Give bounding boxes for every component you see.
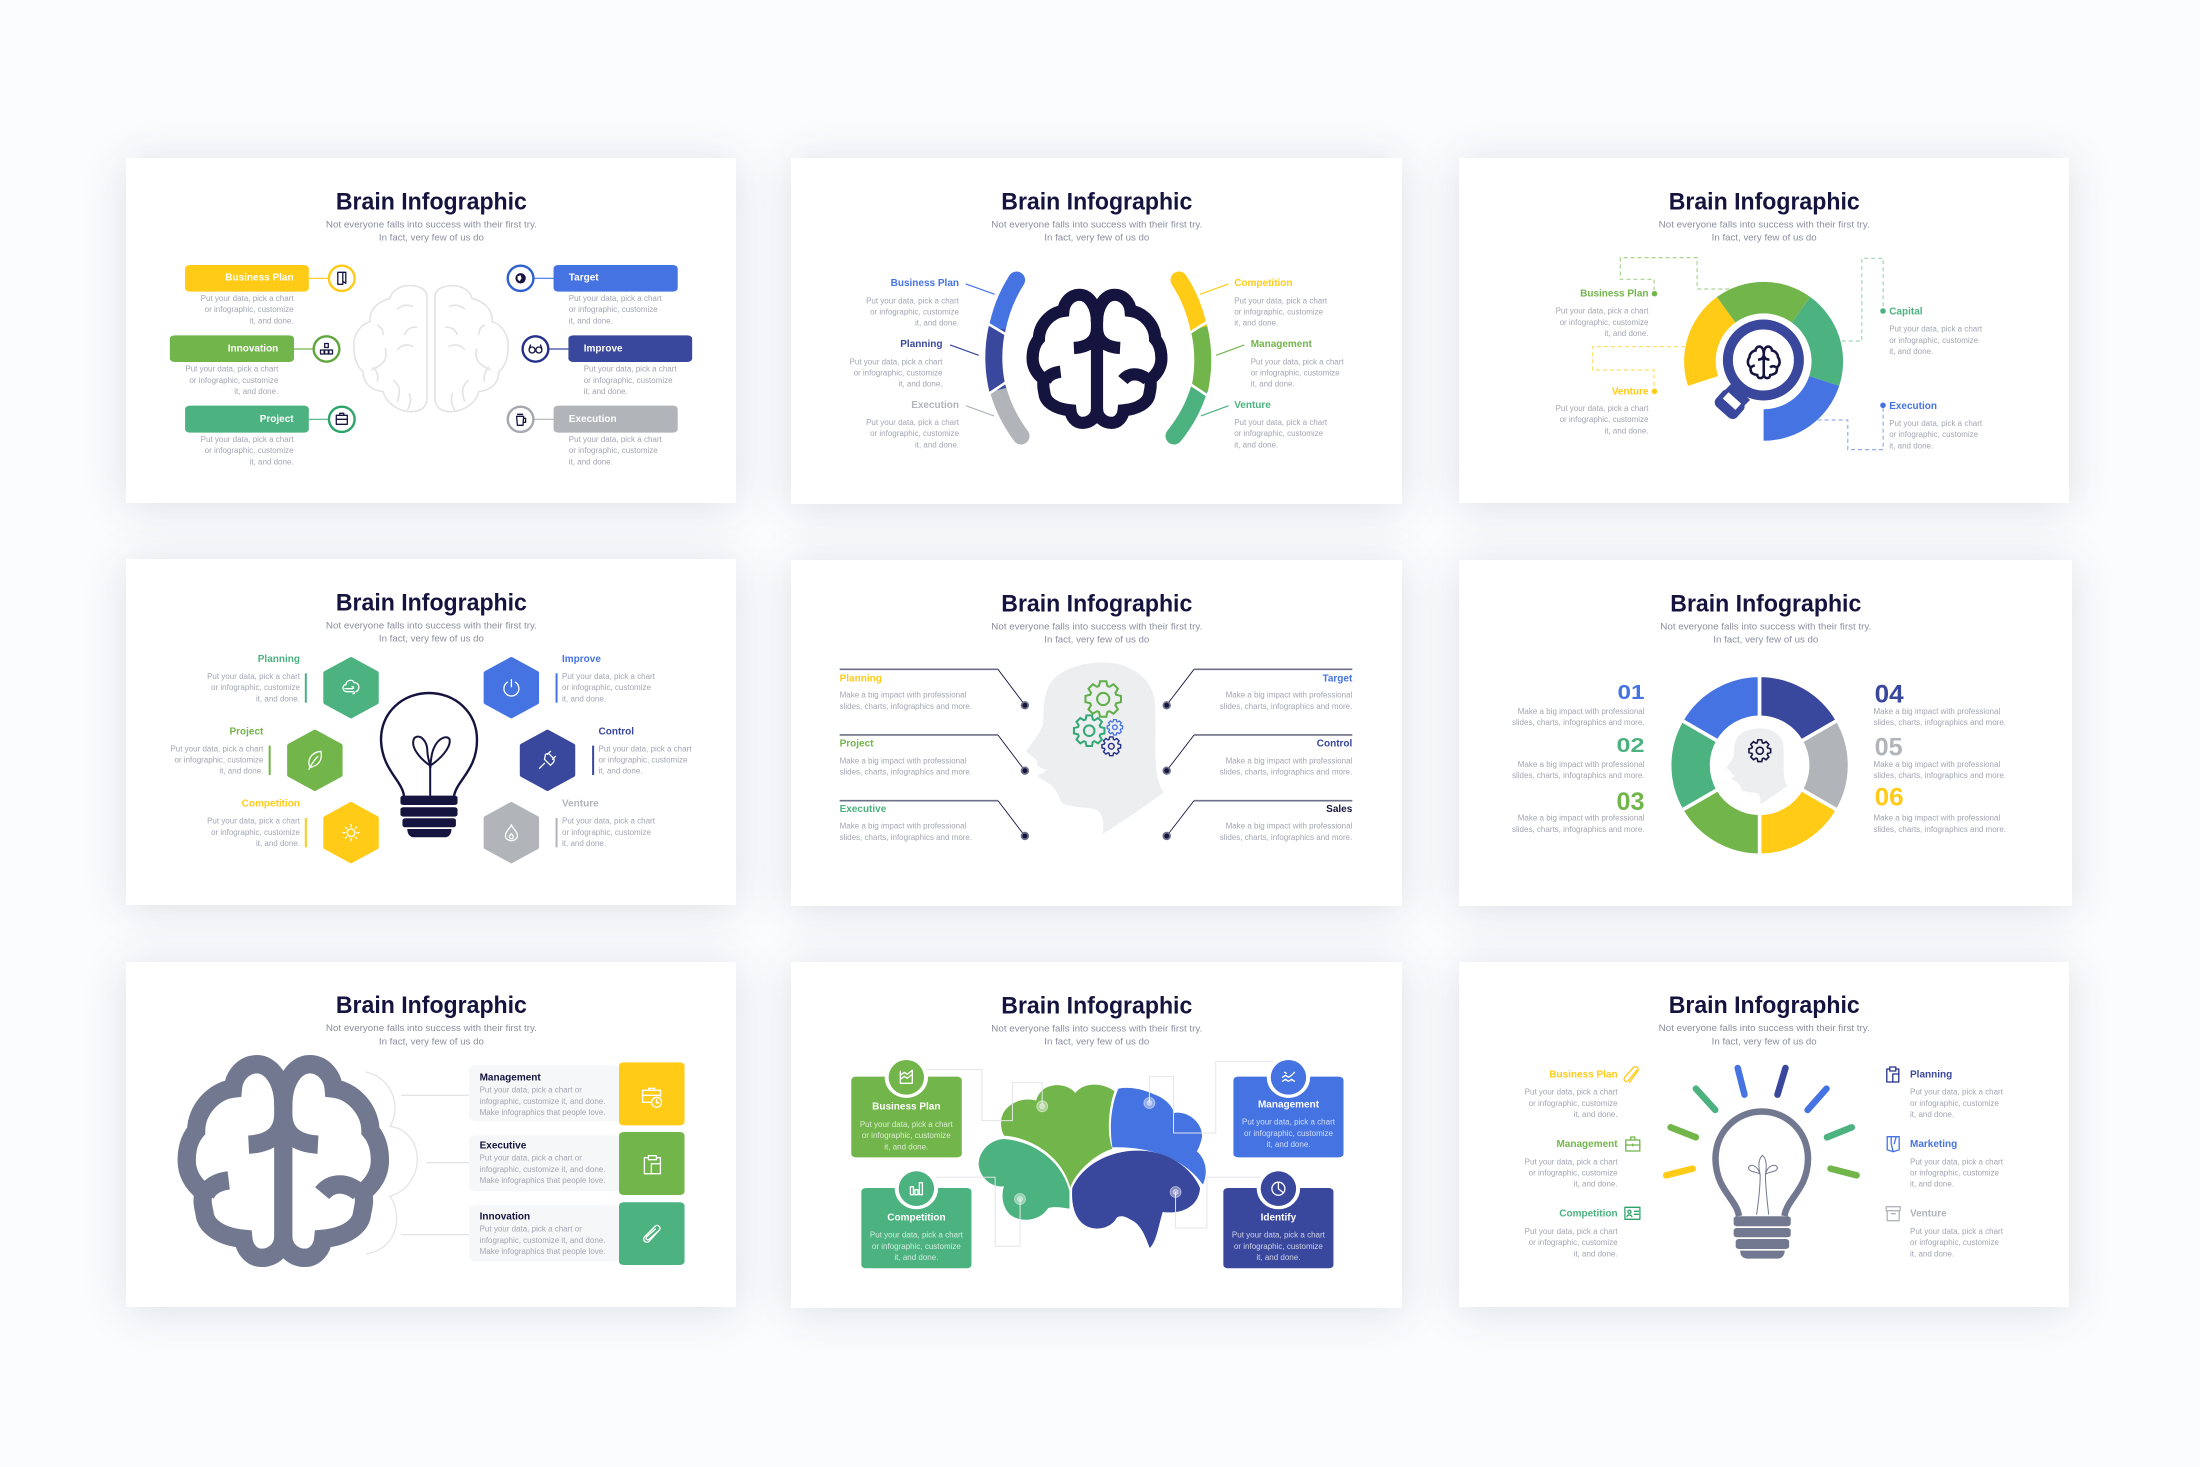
item: Innovation: or infographic, customize <box>189 376 279 385</box>
title: Brain Infographic <box>336 589 527 616</box>
item: Venture: it, and done. <box>1234 440 1278 449</box>
panel: head with gears <box>791 560 1402 906</box>
item: 02 <box>1512 735 1645 780</box>
panel: brain with curved segments <box>791 158 1402 504</box>
item: Planning: or infographic, customize <box>854 368 943 378</box>
item: 02: Make a big impact with professional <box>1518 760 1645 769</box>
title: Brain Infographic <box>1001 188 1192 215</box>
item: Venture: Venture <box>1234 400 1271 411</box>
item: Competition: Competition <box>242 799 300 810</box>
item: 04: Make a big impact with professional <box>1874 707 2000 716</box>
item: Target: it, and done. <box>569 316 613 325</box>
item: 04: slides, charts, infographics and more. <box>1874 718 2006 727</box>
icon: dark gear <box>1749 740 1771 762</box>
item: Business Plan: it, and done. <box>1574 1110 1618 1119</box>
item: Project: Project <box>229 726 264 737</box>
item: Target: slides, charts, infographics and more. <box>1220 702 1352 711</box>
item: Capital: Capital <box>1889 307 1923 318</box>
item: Business Plan <box>185 265 355 325</box>
item: Project: or infographic, customize <box>205 446 294 455</box>
item: Management: infographic, customize it, and done. <box>480 1097 605 1106</box>
item: Competition <box>1234 278 1328 328</box>
card: Management: it, and done. <box>1266 1140 1311 1149</box>
card: Identify: Identify <box>1261 1212 1297 1223</box>
item: Planning: Planning <box>840 673 882 684</box>
subtitle: In fact, very few of us do <box>1712 233 1817 243</box>
icon: slate brain <box>187 1064 380 1258</box>
item: 06: 06 <box>1875 784 1904 812</box>
item: Competition: it, and done. <box>1574 1249 1618 1258</box>
item: Business Plan: Business Plan <box>1549 1069 1618 1080</box>
card: Identify: or infographic, customize <box>1234 1242 1323 1251</box>
item: Planning: Planning <box>258 654 300 665</box>
item: Improve: Put your data, pick a chart <box>584 365 677 374</box>
item: Execution: Execution <box>569 414 617 425</box>
item: Business Plan <box>1525 1067 1638 1119</box>
item: Planning: Put your data, pick a chart <box>850 357 943 366</box>
item: 05: slides, charts, infographics and more. <box>1874 771 2006 780</box>
rays <box>1666 1068 1857 1175</box>
ring segments <box>1670 675 1850 855</box>
subtitle: In fact, very few of us do <box>1044 635 1149 645</box>
item: Marketing: Marketing <box>1910 1139 1957 1150</box>
item: Business Plan: Put your data, pick a chart <box>1525 1088 1618 1097</box>
subtitle: In fact, very few of us do <box>1713 635 1818 645</box>
item: Project: Project <box>840 739 874 750</box>
card: Competition: Competition <box>887 1212 946 1223</box>
panel: large slate brain with cards <box>126 962 736 1307</box>
item: Business Plan: Put your data, pick a chart <box>201 294 294 303</box>
subtitle: Not everyone falls into success with their first try. <box>991 1023 1202 1033</box>
item: Project: Put your data, pick a chart <box>170 744 264 753</box>
item: Project <box>185 406 355 466</box>
item: Executive: Executive <box>840 804 887 815</box>
subtitle: Not everyone falls into success with their first try. <box>326 219 537 229</box>
item: Business Plan: or infographic, customize <box>205 305 294 314</box>
item: Project: it, and done. <box>250 457 294 466</box>
subtitle: Not everyone falls into success with their first try. <box>991 219 1202 229</box>
card: Competition: or infographic, customize <box>872 1242 961 1251</box>
item: Management: Management <box>1251 339 1312 350</box>
item: Capital: or infographic, customize <box>1889 336 1979 345</box>
item: Control: Make a big impact with professional <box>1226 756 1353 765</box>
title: Brain Infographic <box>1669 992 1860 1019</box>
item: Executive <box>840 801 1029 842</box>
item: Project <box>170 726 341 789</box>
item: Improve: Put your data, pick a chart <box>562 672 656 681</box>
item: Capital: it, and done. <box>1889 347 1933 356</box>
title: Brain Infographic <box>1670 590 1861 617</box>
icon: teal gear <box>1074 715 1104 746</box>
item: Execution: Execution <box>911 400 959 411</box>
connector brackets <box>366 1072 469 1254</box>
item: Control: Put your data, pick a chart <box>598 744 692 753</box>
card: Identify <box>1223 1168 1333 1268</box>
item: Business Plan <box>1556 289 1657 338</box>
item: Planning: Planning <box>900 339 942 350</box>
item: Planning <box>1887 1067 2004 1119</box>
connector lines <box>950 284 1244 416</box>
right arc segments <box>1174 280 1210 436</box>
item: Planning: or infographic, customize <box>211 683 301 692</box>
icon: green gear <box>1085 681 1121 717</box>
icon: dark brain <box>1033 295 1161 423</box>
item: Execution: Put your data, pick a chart <box>569 435 663 444</box>
item: Management <box>469 1062 685 1125</box>
item: Innovation: Put your data, pick a chart <box>185 365 279 374</box>
item: Venture: Put your data, pick a chart <box>1910 1227 2004 1236</box>
item: 05 <box>1874 734 2006 780</box>
item: Improve <box>486 654 656 716</box>
item: Executive: Put your data, pick a chart or <box>480 1154 582 1163</box>
subtitle: In fact, very few of us do <box>379 634 484 644</box>
item: Project: slides, charts, infographics and more. <box>840 768 972 776</box>
item: Capital <box>1880 307 1983 356</box>
item: Sales <box>1162 801 1353 842</box>
donut segments <box>1684 282 1843 441</box>
item: Execution: it, and done. <box>915 440 959 449</box>
item: Execution: or infographic, customize <box>569 446 658 455</box>
item: Target <box>508 265 678 325</box>
brain outline <box>354 286 508 412</box>
item: Marketing: it, and done. <box>1910 1180 1954 1189</box>
item: Target: Make a big impact with professional <box>1226 691 1353 700</box>
item: Competition: or infographic, customize <box>1234 308 1324 316</box>
item: 03 <box>1512 788 1645 834</box>
item: Venture: or infographic, customize <box>1560 415 1649 424</box>
item: 01: slides, charts, infographics and more. <box>1512 718 1644 727</box>
item: Business Plan <box>866 278 960 328</box>
item: 06 <box>1874 784 2006 834</box>
subtitle: In fact, very few of us do <box>1044 1037 1149 1047</box>
item: Business Plan: Business Plan <box>225 273 294 284</box>
title: Brain Infographic <box>1669 188 1860 215</box>
item: Planning: slides, charts, infographics and more. <box>840 702 972 711</box>
item: Project: Make a big impact with professional <box>840 756 967 765</box>
item: Competition: Competition <box>1234 278 1293 289</box>
target markers <box>1014 1098 1181 1204</box>
item: Project <box>840 735 1029 776</box>
title: Brain Infographic <box>336 188 527 215</box>
item: Venture: Venture <box>1910 1209 1947 1220</box>
item: Executive: Make a big impact with professional <box>840 822 967 831</box>
item: Management: Make infographics that people love. <box>480 1108 605 1117</box>
item: 01: Make a big impact with professional <box>1518 707 1645 716</box>
item: Venture: Put your data, pick a chart <box>1556 404 1649 413</box>
item: Venture: it, and done. <box>562 839 606 848</box>
item: Management: it, and done. <box>1574 1180 1618 1189</box>
card: Management: Put your data, pick a chart <box>1242 1118 1336 1127</box>
item: Execution: Put your data, pick a chart <box>866 418 960 427</box>
item: Control: or infographic, customize <box>598 756 688 764</box>
item: Management: Put your data, pick a chart <box>1251 357 1344 366</box>
subtitle: Not everyone falls into success with their first try. <box>326 1023 537 1033</box>
item: Venture <box>1556 386 1657 435</box>
item: Control: Control <box>1317 739 1353 750</box>
brain lobes <box>979 1085 1206 1248</box>
item: Improve: it, and done. <box>562 694 606 703</box>
item: 01 <box>1512 682 1645 727</box>
subtitle: In fact, very few of us do <box>379 233 484 243</box>
item: Planning: it, and done. <box>898 380 942 389</box>
item: Planning <box>840 669 1029 711</box>
item: Management: or infographic, customize <box>1529 1168 1618 1178</box>
item: Venture: Venture <box>1612 386 1649 397</box>
card: Management <box>1233 1057 1344 1157</box>
item: 04: 04 <box>1875 680 1904 708</box>
item: Project: or infographic, customize <box>174 756 264 764</box>
item: Execution <box>1880 401 1983 450</box>
head silhouette <box>1026 662 1164 834</box>
item: Management: Management <box>480 1073 541 1084</box>
item: Innovation <box>170 335 339 396</box>
item: Project: Project <box>260 414 294 425</box>
item: Marketing: or infographic, customize <box>1910 1168 1999 1178</box>
item: Executive: infographic, customize it, and done. <box>480 1165 605 1174</box>
item: Planning <box>850 339 943 389</box>
item: Management <box>1525 1137 1640 1189</box>
item: Venture <box>486 799 656 861</box>
item: Innovation: Innovation <box>480 1212 530 1223</box>
item: Improve: Improve <box>584 343 623 354</box>
item: Business Plan: it, and done. <box>915 319 959 328</box>
card: Business Plan: Put your data, pick a chart <box>860 1120 954 1129</box>
item: Target: Target <box>1322 673 1353 684</box>
subtitle: Not everyone falls into success with their first try. <box>1659 219 1870 229</box>
item: Target <box>1162 669 1353 711</box>
item: Execution: Execution <box>1889 401 1937 412</box>
connector lines <box>924 1061 1273 1246</box>
item: Planning: Planning <box>1910 1069 1952 1080</box>
item: Control: slides, charts, infographics and more. <box>1220 768 1352 776</box>
item: Executive: slides, charts, infographics and more. <box>840 833 972 842</box>
subtitle: Not everyone falls into success with their first try. <box>326 620 537 630</box>
panel: light bulb with hexagons <box>126 559 736 905</box>
item: Innovation: Put your data, pick a chart or <box>480 1225 582 1234</box>
item: Executive <box>469 1132 685 1195</box>
item: Innovation <box>469 1202 685 1265</box>
item: Execution: or infographic, customize <box>870 429 960 438</box>
item: Improve: or infographic, customize <box>584 376 673 385</box>
item: Venture: Put your data, pick a chart <box>562 817 656 826</box>
left arc segments <box>985 280 1021 436</box>
subtitle: In fact, very few of us do <box>1712 1036 1817 1046</box>
item: Planning <box>207 654 377 716</box>
item: 03: slides, charts, infographics and more. <box>1512 825 1644 834</box>
item: Venture <box>1234 400 1328 449</box>
icon: small head <box>1726 728 1787 804</box>
item: Management: Management <box>1556 1139 1618 1150</box>
item: Improve <box>523 335 692 396</box>
item: Competition: Put your data, pick a chart <box>207 817 301 826</box>
item: Management <box>1251 339 1344 389</box>
card: Business Plan <box>851 1057 962 1157</box>
dashed connectors <box>1593 258 1883 450</box>
item: Marketing: Put your data, pick a chart <box>1910 1157 2004 1166</box>
card: Identify: Put your data, pick a chart <box>1232 1231 1326 1240</box>
item: Venture: Put your data, pick a chart <box>1234 418 1328 427</box>
item: Competition: or infographic, customize <box>211 828 301 837</box>
subtitle: In fact, very few of us do <box>379 1036 484 1046</box>
panel: magnifier donut <box>1459 158 2069 503</box>
card: Competition <box>861 1168 971 1268</box>
item: Competition <box>1525 1207 1640 1258</box>
item: Innovation: infographic, customize it, and done. <box>480 1236 605 1245</box>
item: Business Plan: Business Plan <box>891 278 959 289</box>
icon: magnifier bulb <box>1712 324 1799 422</box>
card: Management: Management <box>1258 1100 1320 1111</box>
card: Business Plan: Business Plan <box>872 1102 940 1113</box>
item: Innovation: it, and done. <box>234 387 278 396</box>
item: Business Plan: Put your data, pick a chart <box>866 296 960 305</box>
item: Competition: Put your data, pick a chart <box>1234 296 1328 305</box>
card: Competition: Put your data, pick a chart <box>870 1231 964 1240</box>
item: Planning: or infographic, customize <box>1910 1099 1999 1108</box>
card: Identify: it, and done. <box>1256 1253 1300 1262</box>
item: Business Plan: or infographic, customize <box>1560 318 1649 327</box>
icon: blue gear <box>1107 720 1123 735</box>
item: Sales: slides, charts, infographics and more. <box>1220 833 1352 842</box>
item: Management: or infographic, customize <box>1251 368 1340 378</box>
item: Management: Put your data, pick a chart or <box>480 1086 582 1095</box>
item: Planning: Make a big impact with professional <box>840 691 967 700</box>
item: Improve: or infographic, customize <box>562 683 651 692</box>
item: Executive: Executive <box>480 1141 527 1152</box>
item: Target: Target <box>569 273 599 284</box>
item: Venture: it, and done. <box>1604 426 1648 435</box>
subtitle: In fact, very few of us do <box>1044 233 1149 243</box>
item: Business Plan: it, and done. <box>1604 329 1648 338</box>
item: Sales: Make a big impact with professional <box>1226 822 1353 831</box>
item: Improve: Improve <box>562 654 601 665</box>
item: Control <box>1162 735 1353 776</box>
item: Business Plan: Put your data, pick a chart <box>1556 307 1649 316</box>
item: Competition: it, and done. <box>1234 319 1278 328</box>
icon: slate light bulb <box>1716 1112 1808 1259</box>
item: Planning: Put your data, pick a chart <box>1910 1088 2004 1097</box>
item: 04 <box>1874 680 2006 727</box>
item: Capital: Put your data, pick a chart <box>1889 325 1983 334</box>
subtitle: Not everyone falls into success with their first try. <box>991 621 1202 631</box>
item: Target: Put your data, pick a chart <box>569 294 663 303</box>
item: Business Plan: Business Plan <box>1580 289 1648 300</box>
icon: navy gear <box>1102 737 1121 756</box>
subtitle: Not everyone falls into success with their first try. <box>1659 1023 1870 1033</box>
item: Innovation: Innovation <box>228 343 278 354</box>
item: Target: or infographic, customize <box>569 305 658 314</box>
item: Business Plan: or infographic, customize <box>1529 1099 1618 1108</box>
item: Venture: or infographic, customize <box>1234 429 1324 438</box>
item: Business Plan: or infographic, customize <box>870 308 960 316</box>
subtitle: Not everyone falls into success with their first try. <box>1660 621 1871 631</box>
item: Sales: Sales <box>1326 804 1353 815</box>
item: 06: Make a big impact with professional <box>1874 814 2000 823</box>
title: Brain Infographic <box>1001 590 1192 617</box>
item: 02: slides, charts, infographics and more. <box>1512 771 1644 780</box>
item: 03: Make a big impact with professional <box>1518 814 1645 823</box>
item: Control <box>522 726 692 789</box>
item: Execution: it, and done. <box>1889 441 1933 450</box>
item: Execution: it, and done. <box>569 457 613 466</box>
item: Business Plan: it, and done. <box>250 316 294 325</box>
item: 05: 05 <box>1875 734 1903 762</box>
item: 05: Make a big impact with professional <box>1874 760 2000 769</box>
item: Venture: or infographic, customize <box>1910 1238 1999 1247</box>
item: Execution <box>508 406 678 466</box>
card: Business Plan: or infographic, customize <box>862 1131 951 1140</box>
item: Execution <box>866 400 960 449</box>
item: Project: it, and done. <box>219 767 263 776</box>
item: Venture: Venture <box>562 799 599 810</box>
item: Control: Control <box>598 726 634 737</box>
item: Competition: or infographic, customize <box>1529 1238 1618 1247</box>
icon: light bulb with sprout <box>381 693 477 837</box>
item: Venture: it, and done. <box>1910 1249 1954 1258</box>
item: 01: 01 <box>1618 682 1644 704</box>
card: Management: or infographic, customize <box>1244 1129 1334 1138</box>
item: Management: Put your data, pick a chart <box>1525 1157 1618 1166</box>
title: Brain Infographic <box>1001 992 1192 1019</box>
item: Venture: or infographic, customize <box>562 828 651 837</box>
card: Business Plan: it, and done. <box>884 1142 928 1151</box>
item: Innovation: Make infographics that people love. <box>480 1247 605 1256</box>
item: Competition: it, and done. <box>256 839 300 848</box>
panel: slate bulb with rays <box>1459 962 2069 1307</box>
card: Competition: it, and done. <box>894 1253 938 1262</box>
item: Improve: it, and done. <box>584 387 628 396</box>
panel: brain outline with labelled bars <box>126 158 736 503</box>
item: Execution: Put your data, pick a chart <box>1889 419 1983 428</box>
panel: numbered ring <box>1459 560 2072 906</box>
item: Competition: Put your data, pick a chart <box>1525 1227 1618 1236</box>
item: 03: 03 <box>1616 788 1644 816</box>
item: Planning: it, and done. <box>1910 1110 1954 1119</box>
item: Planning: it, and done. <box>256 694 300 703</box>
item: Competition: Competition <box>1559 1209 1618 1220</box>
item: Execution: or infographic, customize <box>1889 430 1979 439</box>
item: 06: slides, charts, infographics and more. <box>1874 825 2006 834</box>
icon: small brain <box>1748 347 1780 378</box>
item: Project: Put your data, pick a chart <box>201 435 294 444</box>
item: Executive: Make infographics that people love. <box>480 1176 605 1185</box>
item: Marketing <box>1887 1137 2004 1189</box>
item: 02: 02 <box>1616 735 1644 757</box>
item: Management: it, and done. <box>1251 380 1295 389</box>
title: Brain Infographic <box>336 992 527 1019</box>
item: Competition <box>207 799 377 861</box>
item: Venture <box>1886 1207 2004 1258</box>
item: Planning: Put your data, pick a chart <box>207 672 301 681</box>
panel: coloured brain with cards <box>791 962 1402 1308</box>
item: Control: it, and done. <box>598 767 643 776</box>
